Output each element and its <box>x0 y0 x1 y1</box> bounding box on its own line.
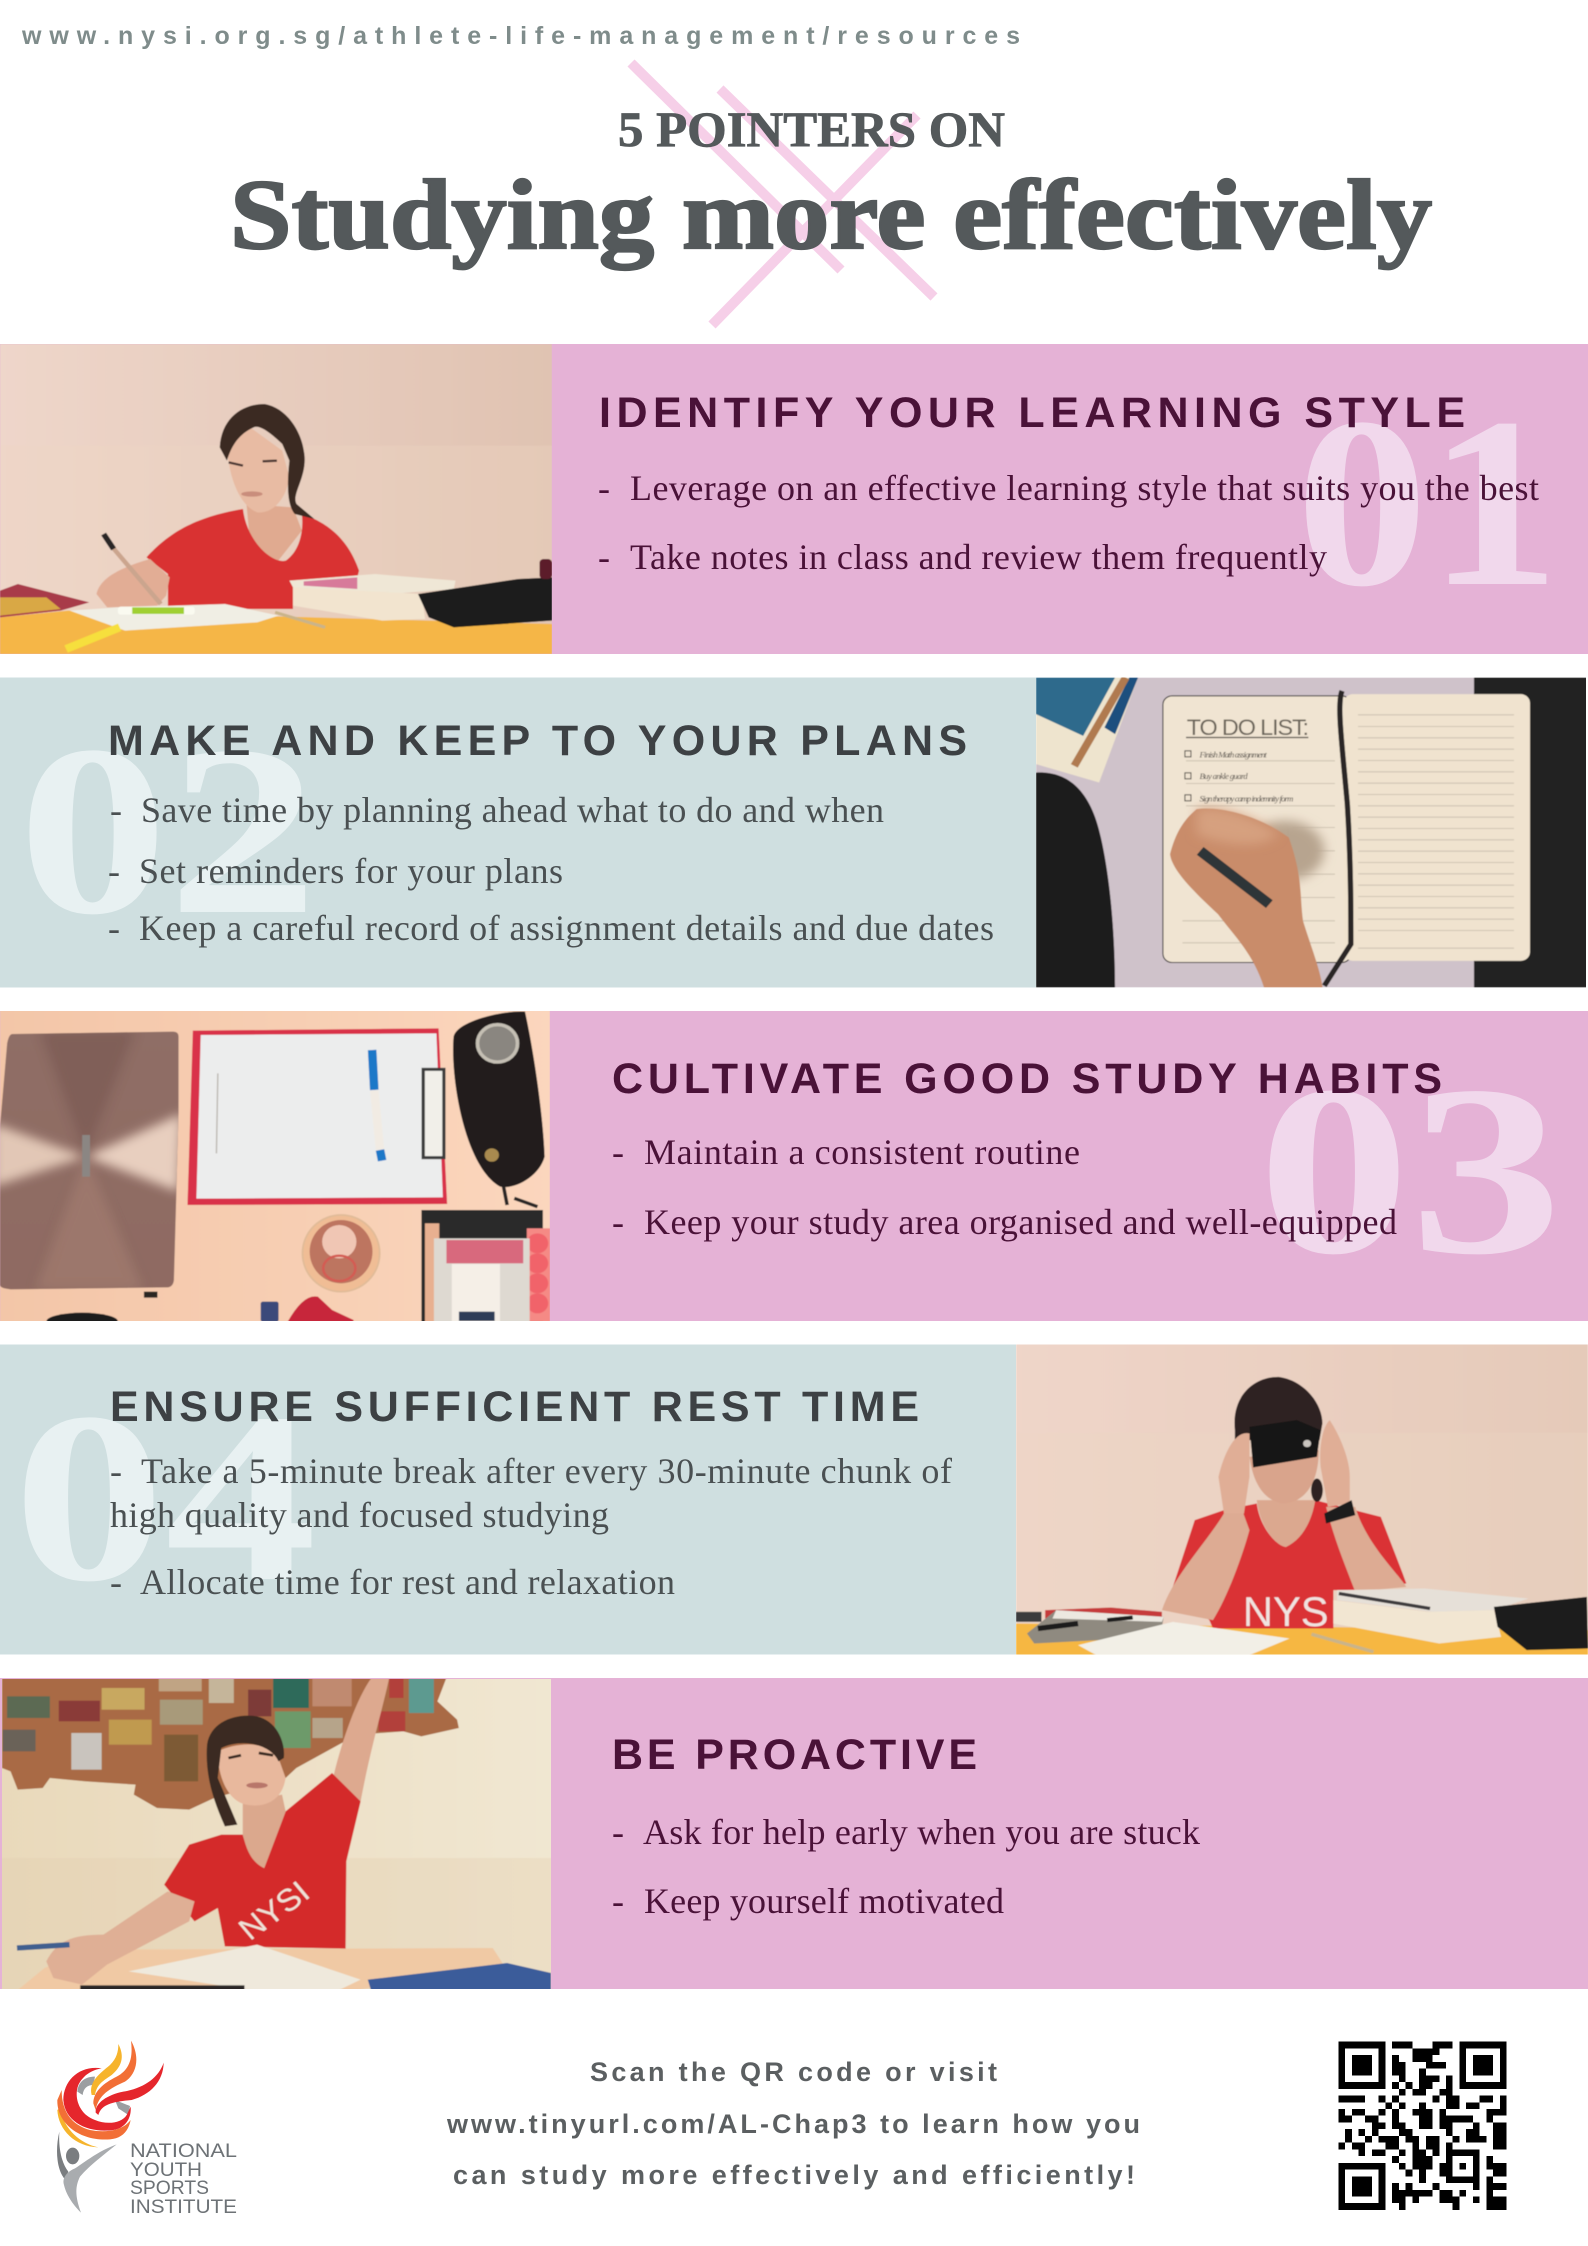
bullet list: - <box>612 1812 624 1852</box>
bullet list: Keep a careful record of assignment details and due dates <box>139 908 994 948</box>
bullet list: - <box>612 1202 624 1242</box>
bullet list <box>612 1812 1200 1921</box>
footer call to action: Scan the QR code or visit <box>590 2057 997 2087</box>
bullet list: - <box>110 1562 122 1602</box>
panel background <box>0 678 1036 988</box>
photo: student putting on an eye mask: NYS <box>1243 1589 1329 1636</box>
heading: MAKE AND KEEP TO YOUR PLANS <box>108 717 967 765</box>
photo: to do list notebook: Sign therapy camp indemnity form <box>1199 794 1293 803</box>
photo: to do list notebook <box>1036 678 1586 988</box>
heading: BE PROACTIVE <box>612 1731 977 1779</box>
logo: national youth sports institute <box>57 2041 237 2218</box>
large number 01: 01 <box>1296 367 1560 637</box>
bullet list: - <box>612 1132 624 1172</box>
large number 03: 03 <box>1258 1035 1562 1305</box>
bullet list: Keep yourself motivated <box>644 1881 1004 1921</box>
large number 02: 02 <box>18 695 318 965</box>
photo: student raising a hand <box>2 1679 551 1989</box>
photo: to do list notebook: TO DO LIST: <box>1187 714 1309 740</box>
bullet list: Set reminders for your plans <box>139 851 563 891</box>
large number 04: 04 <box>13 1362 317 1632</box>
panel 1: identify your learning style <box>0 344 1588 654</box>
footer call to action: www.tinyurl.com/AL-Chap3 to learn how you <box>446 2109 1140 2139</box>
bullet list: Allocate time for rest and relaxation <box>140 1562 675 1602</box>
bullet list: - <box>598 468 610 508</box>
bullet list <box>110 1451 952 1602</box>
footer call to action <box>446 2057 1140 2190</box>
bullet list: Leverage on an effective learning style that suits you the best <box>630 468 1539 508</box>
panel background <box>0 344 1588 654</box>
pink cross over the word more <box>631 63 934 325</box>
photo: student raising a hand: NYSI <box>231 1874 316 1947</box>
bullet list <box>108 790 994 948</box>
bullet list: high quality and focused studying <box>110 1495 609 1535</box>
bullet list: Ask for help early when you are stuck <box>643 1812 1200 1852</box>
bullet list: - <box>612 1881 624 1921</box>
heading: IDENTIFY YOUR LEARNING STYLE <box>599 389 1465 437</box>
panel 5: be proactive <box>0 1678 1588 1991</box>
logo wordmark: YOUTH <box>130 2160 202 2181</box>
bullet list: - <box>110 790 122 830</box>
bullet list: Keep your study area organised and well-equipped <box>644 1202 1397 1242</box>
bullet list: Take a 5-minute break after every 30-minute chunk of <box>141 1451 952 1491</box>
bullet list <box>612 1132 1397 1242</box>
bullet list: Take notes in class and review them frequently <box>630 537 1327 577</box>
logo wordmark: SPORTS <box>130 2178 209 2199</box>
logo wordmark: NATIONAL <box>130 2141 237 2162</box>
bullet list: Maintain a consistent routine <box>644 1132 1080 1172</box>
title kicker: 5 POINTERS ON <box>618 101 1005 157</box>
photo: student writing at a desk <box>0 344 552 654</box>
heading: CULTIVATE GOOD STUDY HABITS <box>612 1055 1442 1103</box>
panel 4: ensure sufficient rest time <box>0 1344 1588 1657</box>
bullet list <box>598 468 1539 577</box>
panel background <box>0 1344 1016 1654</box>
bullet list: Save time by planning ahead what to do and when <box>141 790 884 830</box>
QR code <box>1338 2042 1507 2210</box>
icon: flame and athlete emblem <box>57 2041 164 2213</box>
photo: to do list notebook: Finish Math assignment <box>1198 750 1267 759</box>
panel 3: cultivate good study habits <box>0 1010 1588 1330</box>
bullet list: - <box>108 908 120 948</box>
panel background <box>0 1678 1588 1989</box>
photo: tidy desk from above <box>0 1011 550 1321</box>
panel 2: make and keep to your plans <box>0 678 1587 988</box>
panel background <box>0 1011 1588 1321</box>
bullet list: - <box>598 537 610 577</box>
bullet list: - <box>110 1451 122 1491</box>
photo: to do list notebook: Buy ankle guard <box>1199 771 1248 781</box>
footer call to action: can study more effectively and efficiently! <box>453 2160 1135 2190</box>
photo: student putting on an eye mask <box>1016 1344 1588 1654</box>
logo wordmark: INSTITUTE <box>130 2197 237 2218</box>
website url: www.nysi.org.sg/athlete-life-management/resources <box>21 22 1020 50</box>
bullet list: - <box>108 851 120 891</box>
logo wordmark <box>130 2141 237 2218</box>
main title: Studying more effectively <box>230 159 1432 270</box>
heading: ENSURE SUFFICIENT REST TIME <box>110 1383 919 1431</box>
